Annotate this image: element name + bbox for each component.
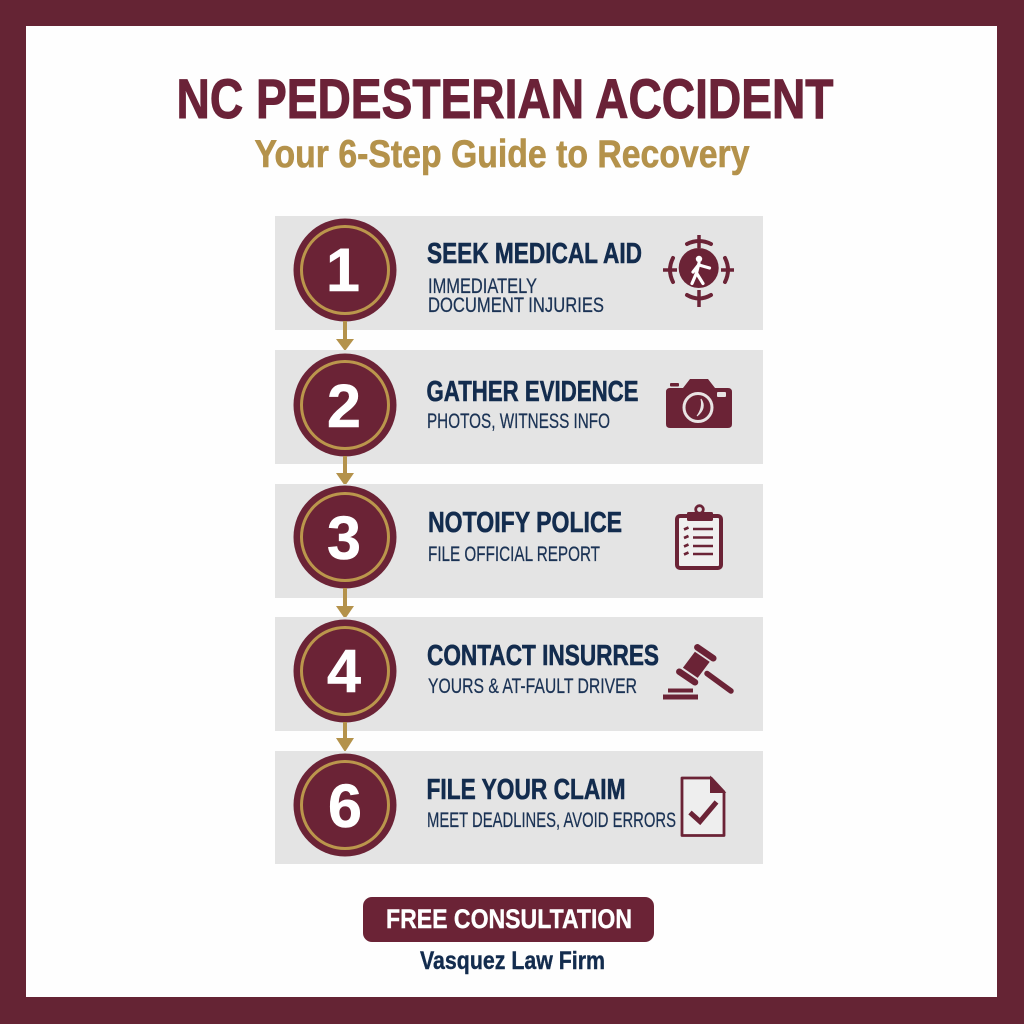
panel: step 2: [275, 350, 763, 464]
arrow: step 1 to 2: [336, 321, 354, 351]
subtitle: Your 6-Step Guide to Recovery: [254, 133, 750, 176]
badge: number 6: [294, 754, 396, 856]
badge: number 6: 6: [328, 772, 362, 840]
panel: step 1: [275, 216, 763, 330]
icon: gavel: [663, 647, 731, 697]
panel: step 6: [275, 751, 763, 864]
text: photos, witness info: PHOTOS, WITNESS INFO: [427, 410, 610, 433]
text: immediately document injuries: DOCUMENT INJURIES: [428, 294, 604, 317]
arrow: step 2 to 3: [336, 456, 354, 486]
badge: number 3: 3: [327, 504, 361, 572]
icon: camera: [666, 379, 732, 428]
icon: document check: [682, 778, 724, 836]
panel: step 4: [275, 617, 763, 731]
heading: seek medical aid: SEEK MEDICAL AID: [427, 238, 642, 270]
heading: file your claim: FILE YOUR CLAIM: [426, 774, 626, 806]
panel: step 3: [275, 484, 763, 598]
heading: contact insurres: CONTACT INSURRES: [427, 640, 659, 672]
arrow: step 3 to 4: [336, 588, 354, 619]
badge: number 3: [294, 486, 396, 588]
title: NC PEDESTERIAN ACCIDENT: [176, 67, 834, 130]
text: yours and at-fault driver: YOURS & AT-FAULT DRIVER: [428, 675, 637, 698]
text: file official report: FILE OFFICIAL REPORT: [428, 543, 600, 566]
arrow: step 4 to 6: [336, 722, 354, 752]
badge: number 1: [294, 218, 396, 322]
badge: number 1: 1: [326, 236, 360, 304]
heading: notoify police: NOTOIFY POLICE: [428, 507, 622, 539]
text: immediately document injuries: [428, 275, 604, 317]
badge: number 2: [294, 354, 396, 456]
badge: number 4: [294, 620, 396, 722]
text: immediately document injuries: IMMEDIATELY: [428, 275, 537, 298]
icon: pedestrian target: [663, 235, 734, 307]
badge: number 2: 2: [327, 372, 361, 440]
firm name: Vasquez Law Firm: [420, 947, 605, 975]
button: free consultation: [363, 897, 654, 942]
icon: clipboard: [677, 506, 721, 568]
heading: gather evidence: GATHER EVIDENCE: [426, 376, 638, 408]
badge: number 4: 4: [327, 637, 361, 705]
text: meet deadlines, avoid errors: MEET DEADLINES, AVOID ERRORS: [427, 809, 676, 832]
button: free consultation: FREE CONSULTATION: [386, 904, 632, 934]
